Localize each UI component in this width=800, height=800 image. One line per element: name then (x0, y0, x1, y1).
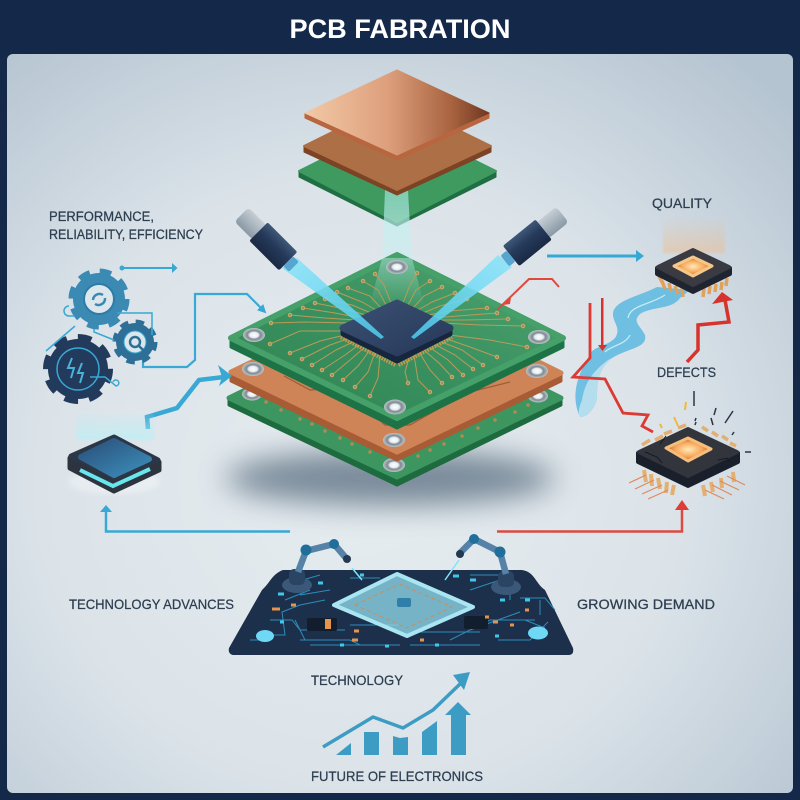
growing demand label: GROWING DEMAND (577, 596, 715, 612)
trace pads (270, 273, 527, 396)
blue flowing ribbon (575, 287, 690, 417)
blue connector line with arrow (143, 294, 264, 367)
glowing nodes (256, 575, 548, 646)
left inspection camera (232, 205, 303, 276)
blue arrow to boards (147, 377, 224, 429)
growing demand arrow (497, 506, 682, 532)
circuit lines (250, 575, 555, 645)
trend line (323, 684, 460, 747)
red zigzag arrow to defects (573, 303, 653, 432)
beam glow on board (370, 258, 424, 305)
lower green board (229, 316, 561, 485)
top green board (231, 255, 563, 428)
stacked circuit boards (229, 255, 563, 485)
dark gear (48, 339, 108, 399)
quality label: QUALITY (652, 195, 713, 211)
raw material layers (299, 70, 496, 265)
title: PCB FABRATION (290, 14, 510, 44)
right inspection camera (497, 204, 571, 271)
right inspection beam (411, 255, 512, 339)
performance text: RELIABILITY, EFFICIENCY (49, 227, 203, 242)
red connector from board (497, 279, 559, 310)
gears icon (46, 273, 154, 399)
medium gear (116, 323, 154, 361)
defects chip icon (629, 391, 751, 499)
trend arrowhead (453, 672, 470, 690)
growth chart icon (323, 672, 471, 755)
left inspection beam (282, 258, 384, 339)
blue module icon (68, 410, 160, 494)
arrow to quality (547, 250, 644, 262)
copper foil layer (305, 70, 489, 160)
red vertical arrow (598, 298, 607, 351)
red arrowhead (712, 292, 733, 304)
future of electronics label: FUTURE OF ELECTRONICS (311, 768, 483, 784)
board shadow (225, 450, 555, 506)
red arrow up to quality (687, 300, 729, 362)
technology advances label: TECHNOLOGY ADVANCES (69, 596, 234, 612)
central processor chip (342, 303, 451, 363)
up arrow bar (445, 702, 471, 755)
quality chip icon (657, 217, 730, 297)
left robot arm (282, 539, 362, 593)
copper inner board (231, 292, 561, 460)
right robot arm (445, 534, 521, 595)
green laminate layer (299, 122, 496, 226)
dark platform (229, 570, 573, 655)
automated fabrication board (229, 534, 573, 655)
blue arrowhead (218, 365, 232, 386)
performance text: PERFORMANCE, (49, 209, 154, 224)
brown prepreg layer (304, 100, 491, 195)
mounting screws (386, 260, 408, 274)
sparks (694, 391, 751, 452)
performance text (49, 209, 203, 242)
technology advances arrow (106, 510, 290, 532)
copper traces (270, 273, 527, 396)
glass plate (334, 574, 473, 636)
arrowhead up red (675, 500, 689, 510)
defects label: DEFECTS (657, 364, 716, 380)
blue gear (73, 273, 125, 325)
vertical light beam (382, 190, 412, 265)
arrowhead up blue (100, 505, 112, 512)
technology label: TECHNOLOGY (311, 672, 404, 688)
chart bars (336, 743, 351, 755)
small blue line with arrow (120, 263, 178, 273)
gear wiring (46, 306, 152, 386)
